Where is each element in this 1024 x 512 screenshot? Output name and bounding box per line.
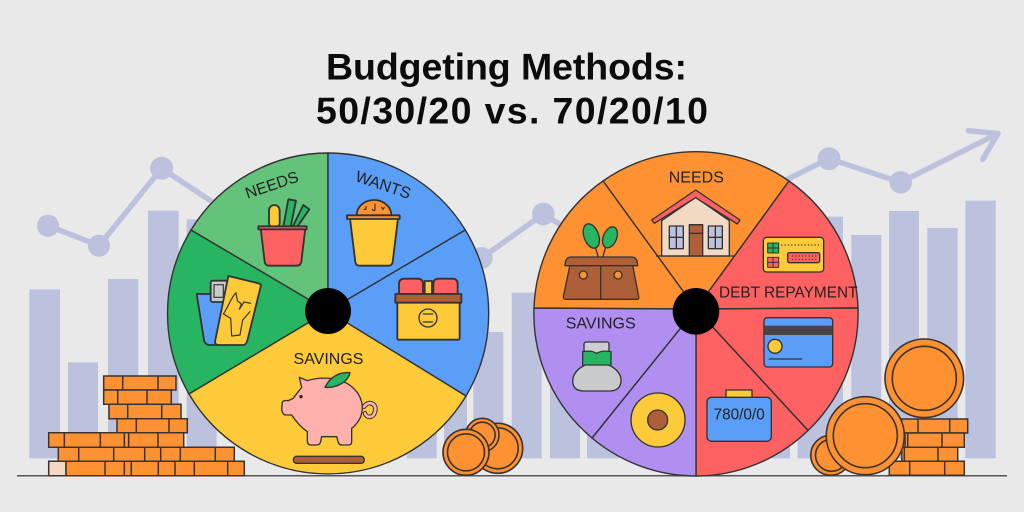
icon: coin ring (631, 393, 685, 447)
icon: briefcase (707, 390, 771, 441)
icon: credit card (764, 318, 833, 367)
label: savings: SAVINGS (294, 351, 363, 368)
label: needs: NEEDS (669, 169, 724, 186)
icon: red plant pot (258, 199, 309, 266)
right wheel: 70/20/10 (534, 152, 858, 476)
icon: briefcase: 780/0/0 (714, 406, 765, 423)
icon: potted sprout (563, 222, 639, 299)
label: savings: SAVINGS (566, 315, 636, 332)
left brick stack (49, 376, 244, 476)
ground line (17, 475, 1007, 476)
hub (673, 288, 719, 335)
icon: yellow bill card (763, 237, 824, 272)
background bar chart (29, 201, 996, 458)
right brick stack (889, 419, 968, 475)
icon: piggy bank (282, 373, 375, 463)
icon: storage box (395, 279, 461, 340)
hub (305, 288, 351, 334)
centre coin pile (443, 418, 523, 475)
icon: money bag (573, 342, 621, 391)
label: needs: NEEDS (243, 169, 301, 203)
label: debt repayment: DEBT REPAYMENT (719, 285, 858, 302)
wheel segments (168, 153, 489, 474)
icon: house (652, 190, 740, 256)
right coin pile (811, 339, 964, 475)
icon: wallet with card (197, 276, 261, 345)
background trend line with arrow (37, 131, 998, 280)
title: 50/30/20 vs. 70/20/10 (316, 89, 708, 131)
icon: yellow bucket (347, 200, 400, 266)
title: Budgeting Methods: (326, 45, 687, 87)
left wheel: 50/30/20 (168, 153, 489, 474)
title (316, 45, 708, 131)
wheel segments (534, 152, 858, 476)
label: wants: WANTS (353, 169, 413, 203)
